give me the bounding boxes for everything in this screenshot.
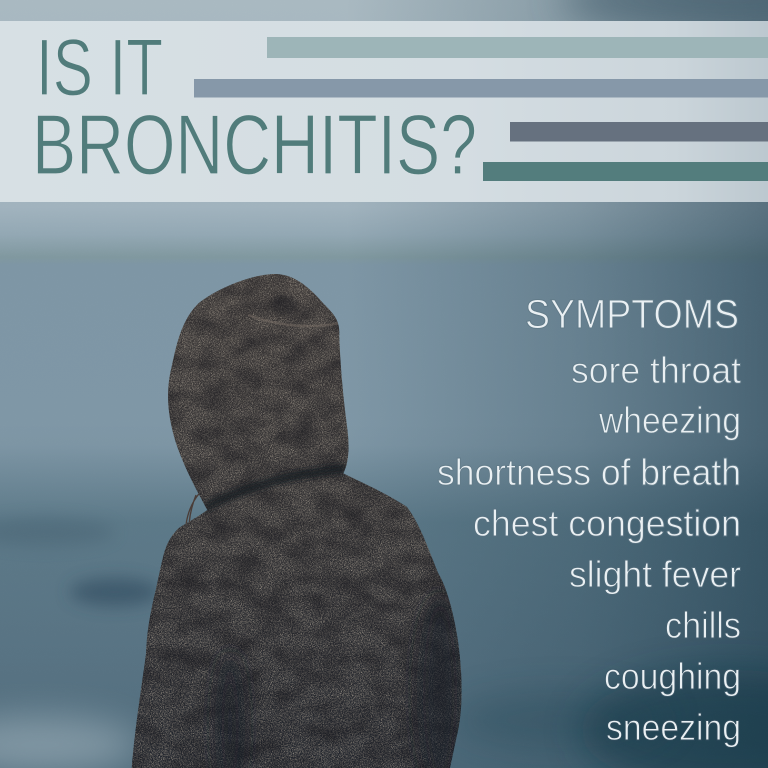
symptom: wheezing: wheezing — [598, 400, 741, 441]
bar: dark slate — [510, 122, 768, 142]
symptom: chills: chills — [665, 605, 741, 646]
symptom: shortness of breath: shortness of breath — [437, 452, 741, 493]
symptom: sneezing: sneezing — [606, 707, 741, 748]
bar: deep teal — [483, 162, 768, 181]
title line: BRONCHITIS?: BRONCHITIS? — [32, 98, 477, 193]
neck shadow — [203, 468, 347, 508]
hoodie — [132, 274, 462, 768]
symptoms heading: SYMPTOMS — [525, 291, 739, 337]
figure: person in hooded sweater seen from behind — [132, 274, 462, 768]
symptom: chest congestion: chest congestion — [473, 503, 741, 544]
symptom: coughing: coughing — [604, 656, 741, 697]
title line: IS IT: IS IT — [36, 23, 163, 113]
hood rim highlight — [248, 315, 338, 326]
symptoms list — [437, 291, 742, 748]
hair strands beside hood — [186, 493, 199, 525]
hood opening shadow — [268, 295, 298, 315]
bar: slate blue — [194, 79, 768, 98]
symptom: slight fever: slight fever — [569, 554, 741, 595]
symptom: sore throat: sore throat — [571, 350, 742, 391]
bar: pale teal — [267, 37, 768, 58]
title band — [0, 21, 768, 202]
sleeve and lower shading — [215, 650, 245, 768]
